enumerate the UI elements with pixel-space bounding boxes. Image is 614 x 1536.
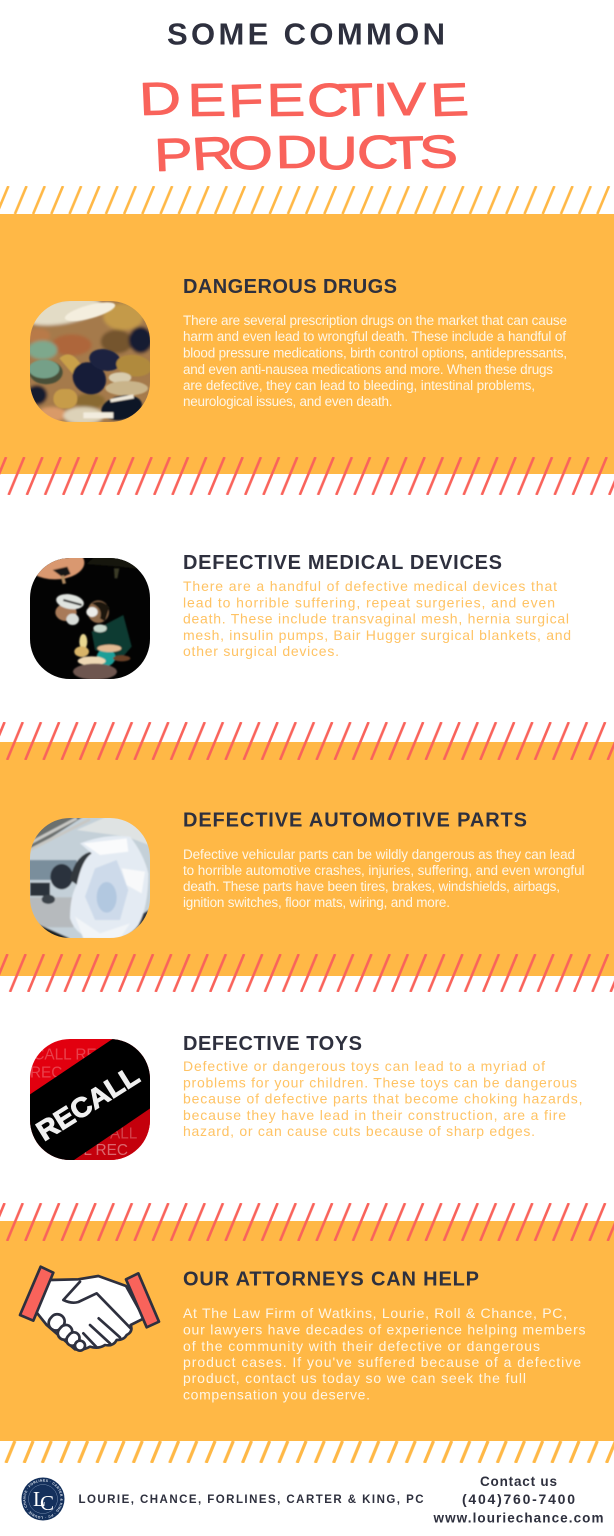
text: toys body: hazard, or can cause cuts because of sharp edges. xyxy=(183,1123,535,1139)
heading: defective products xyxy=(138,73,470,182)
text: automotive parts body xyxy=(183,847,584,910)
heading: defective medical devices: DEFECTIVE MEDICAL DEVICES xyxy=(183,552,502,574)
text: dangerous drugs body: neurological issues, and even death. xyxy=(183,394,392,409)
text: attorneys body: our lawyers have decades of experience helping members xyxy=(183,1322,586,1338)
logo: LC seal: C xyxy=(40,1491,54,1515)
text: toys body: because they have lead in their construction, are a fire xyxy=(183,1107,566,1123)
icon: recall badge: REC xyxy=(30,1064,62,1081)
contact details: Contact us xyxy=(480,1474,557,1489)
text: dangerous drugs body: There are several prescription drugs on the market that can cause xyxy=(183,313,567,328)
text: dangerous drugs body: are defective, they can lead to bleeding, intestinal problems, xyxy=(183,378,535,393)
text: dangerous drugs body: harm and even lead to wrongful death. These include a handful of xyxy=(183,329,566,344)
text: dangerous drugs body: blood pressure medications, birth control options, antidepressants, xyxy=(183,346,567,360)
logo: LC seal: LOURIE · CHANCE · FORLINES · CARTER & KING · PC · xyxy=(23,1479,63,1519)
logo: LC seal: L xyxy=(33,1487,46,1511)
text: attorneys body: of the community with their defective or dangerous xyxy=(183,1338,540,1354)
icon: recall badge: RECALL xyxy=(31,1060,145,1147)
heading: our attorneys can help: OUR ATTORNEYS CAN HELP xyxy=(183,1268,479,1290)
text: attorneys body: product cases. If you've suffered because of a defective xyxy=(183,1354,581,1370)
text: toys body: problems for your children. These toys can be dangerous xyxy=(183,1074,577,1090)
text: medical devices body: death. These include transvaginal mesh, hernia surgical xyxy=(183,610,569,626)
text: automotive parts body: death. These parts have been tires, brakes, windshields, airbags, xyxy=(183,879,560,894)
photo: pills xyxy=(30,301,150,422)
panel: our attorneys can help xyxy=(0,1221,614,1441)
heading: dangerous drugs: DANGEROUS DRUGS xyxy=(183,276,397,298)
text: medical devices body: other surgical devices. xyxy=(183,643,339,659)
text: automotive parts body: to horrible automotive crashes, injuries, suffering, and even wrongful xyxy=(183,863,584,878)
icon: recall badge xyxy=(30,1039,150,1160)
text: attorneys body: compensation you deserve. xyxy=(183,1386,370,1402)
text: medical devices body: mesh, insulin pumps, Bair Hugger surgical blankets, and xyxy=(183,627,571,643)
heading: defective products: PRODUCTS xyxy=(153,126,459,182)
contact details xyxy=(432,1474,604,1526)
contact details: (404)760-7400 xyxy=(462,1491,575,1507)
heading: defective toys: DEFECTIVE TOYS xyxy=(183,1033,362,1055)
footer xyxy=(22,1474,604,1526)
heading: defective automotive parts: DEFECTIVE AUTOMOTIVE PARTS xyxy=(183,810,527,832)
firm name: LOURIE, CHANCE, FORLINES, CARTER & KING, PC xyxy=(78,1494,424,1506)
contact details: www.louriechance.com xyxy=(432,1510,604,1526)
photo: deployed airbag xyxy=(30,818,150,938)
heading: some common: SOME COMMON xyxy=(167,16,445,52)
text: toys body: Defective or dangerous toys can lead to a myriad of xyxy=(183,1058,545,1074)
panel: defective medical devices xyxy=(0,495,614,722)
title block xyxy=(138,16,470,182)
panel: dangerous drugs xyxy=(0,214,614,474)
text: attorneys body: product, contact us today so we can seek the full xyxy=(183,1370,526,1386)
text: attorneys body xyxy=(183,1305,586,1402)
heading: defective products: DEFECTIVE xyxy=(138,73,470,128)
text: toys body: because of defective parts that become choking hazards, xyxy=(183,1090,582,1106)
text: automotive parts body: ignition switches, floor mats, wiring, and more. xyxy=(183,895,450,910)
text: attorneys body: At The Law Firm of Watkins, Lourie, Roll & Chance, PC, xyxy=(183,1305,567,1321)
text: dangerous drugs body: and even anti-nausea medications and more. When these drugs xyxy=(183,362,553,377)
text: automotive parts body: Defective vehicular parts can be wildly dangerous as they can lead xyxy=(183,847,575,862)
text: medical devices body xyxy=(183,578,571,659)
icon: recall badge: L REC xyxy=(83,1142,128,1159)
text: medical devices body: There are a handful of defective medical devices that xyxy=(183,578,557,594)
text: medical devices body: lead to horrible suffering, repeat surgeries, and even xyxy=(183,594,555,610)
panel: defective automotive parts xyxy=(0,742,614,976)
text: toys body xyxy=(183,1058,582,1139)
icon: recall badge: CALL RE xyxy=(33,1046,97,1063)
icon: handshake xyxy=(20,1267,159,1351)
photo: surgeons xyxy=(30,558,150,679)
icon: recall badge: ALL xyxy=(110,1125,138,1142)
text: dangerous drugs body xyxy=(183,313,567,409)
panel: defective toys xyxy=(30,1036,582,1160)
